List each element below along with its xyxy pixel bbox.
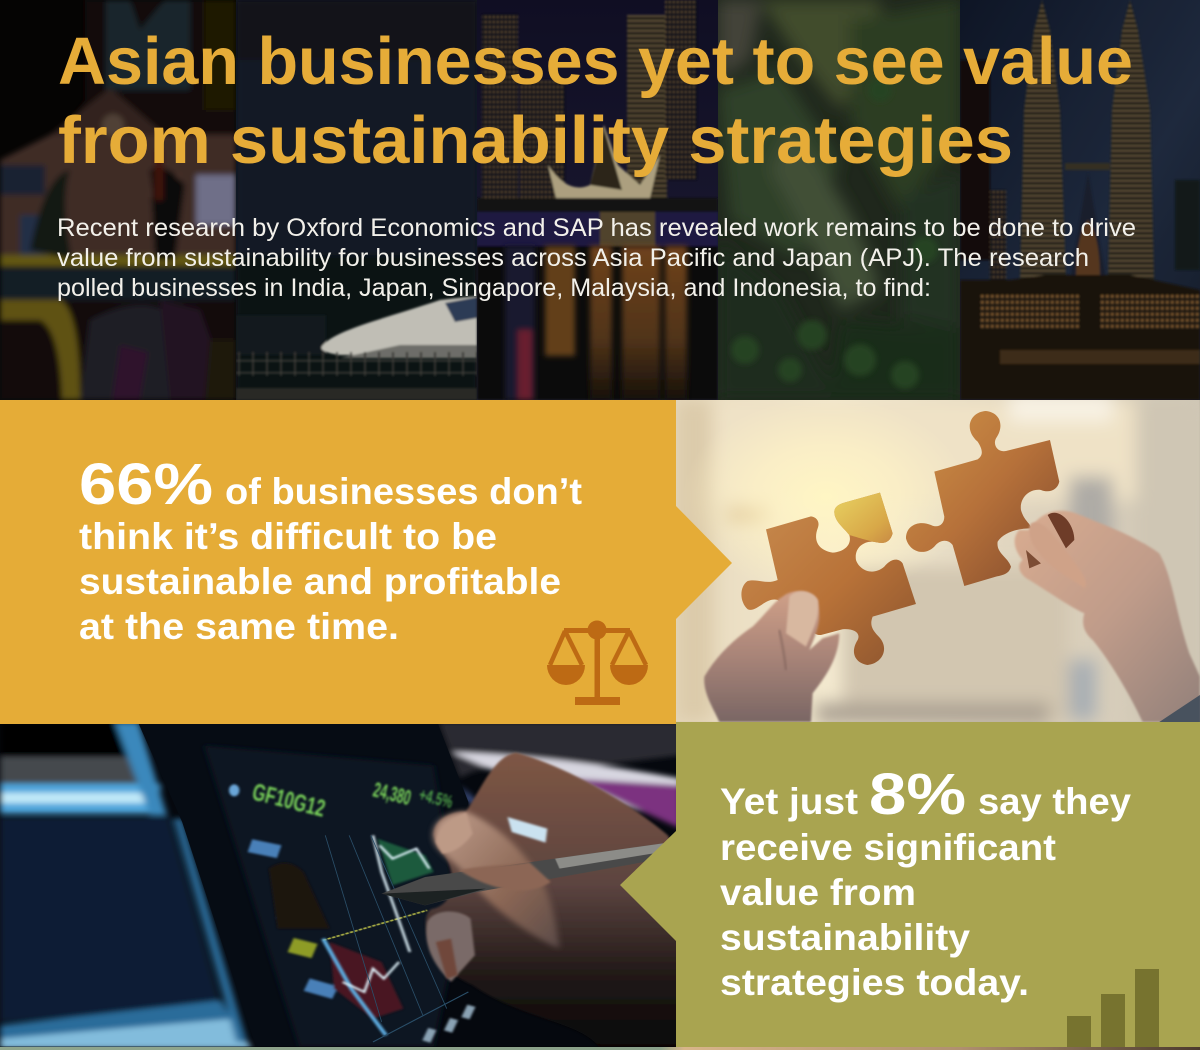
- photo: Singapore skyline and ArtScience Museum: [477, 0, 718, 400]
- photo: green terraces aerial: [718, 0, 960, 400]
- statistic text: think it’s difficult to be: [79, 516, 497, 557]
- bottom image strip: [0, 1047, 1200, 1050]
- intro paragraph: [57, 214, 1136, 302]
- left puzzle piece: [741, 493, 916, 665]
- panel background with arrow: [0, 400, 732, 724]
- photo: Petronas Towers Kuala Lumpur: [960, 0, 1200, 400]
- statistic text: value from: [720, 872, 916, 913]
- stylus: [382, 854, 652, 906]
- icon: balance scale: [547, 620, 648, 705]
- photo: hands joining puzzle pieces: [676, 393, 1200, 723]
- screen readouts: [229, 784, 434, 1019]
- panel: 66% statistic: [0, 400, 732, 724]
- statistic text: say they: [978, 781, 1131, 822]
- intro paragraph: polled businesses in India, Japan, Singapore, Malaysia, and Indonesia, to find:: [57, 274, 931, 302]
- header photo collage: [0, 0, 1200, 400]
- statistic text: receive significant: [720, 827, 1056, 868]
- statistic text: of businesses don’t: [225, 471, 582, 512]
- statistic text: 66%: [79, 452, 213, 517]
- screen text: chart ticker: 24,380: [371, 779, 413, 810]
- statistic text: [720, 762, 1131, 1003]
- screen text: chart ticker: [250, 779, 455, 823]
- dark overlay for legibility: [0, 0, 1200, 400]
- intro paragraph: value from sustainability for businesses across Asia Pacific and Japan (APJ). The research: [57, 244, 1089, 272]
- statistic text: sustainable and profitable: [79, 561, 561, 602]
- screen text: chart ticker: +4.5%: [417, 784, 455, 812]
- tablet screen: [138, 724, 468, 962]
- statistic text: 8%: [869, 762, 966, 827]
- intro paragraph: Recent research by Oxford Economics and SAP has revealed work remains to be done to drive: [57, 214, 1136, 242]
- statistic text: at the same time.: [79, 606, 399, 647]
- right hand: [1015, 511, 1200, 722]
- statistic text: strategies today.: [720, 962, 1029, 1003]
- title: from sustainability strategies: [58, 103, 1013, 178]
- panel: 8% statistic: [620, 722, 1200, 1047]
- title: [58, 24, 1133, 178]
- photo: stylus on trading chart tablet: [0, 722, 681, 1049]
- photo: Mumbai railway terminus at night: [0, 0, 236, 400]
- icon: rising bar chart: [1067, 969, 1159, 1047]
- panel background with arrow: [620, 722, 1200, 1047]
- right puzzle piece: [906, 411, 1059, 586]
- screen text: chart ticker: GF10G12: [250, 779, 328, 823]
- statistic text: sustainability: [720, 917, 970, 958]
- statistic text: [79, 452, 582, 647]
- title: Asian businesses yet to see value: [58, 24, 1133, 99]
- statistic text: Yet just: [720, 781, 858, 822]
- hand holding stylus: [426, 753, 679, 1047]
- photo: bullet train: [236, 0, 477, 400]
- left hand: [704, 591, 839, 722]
